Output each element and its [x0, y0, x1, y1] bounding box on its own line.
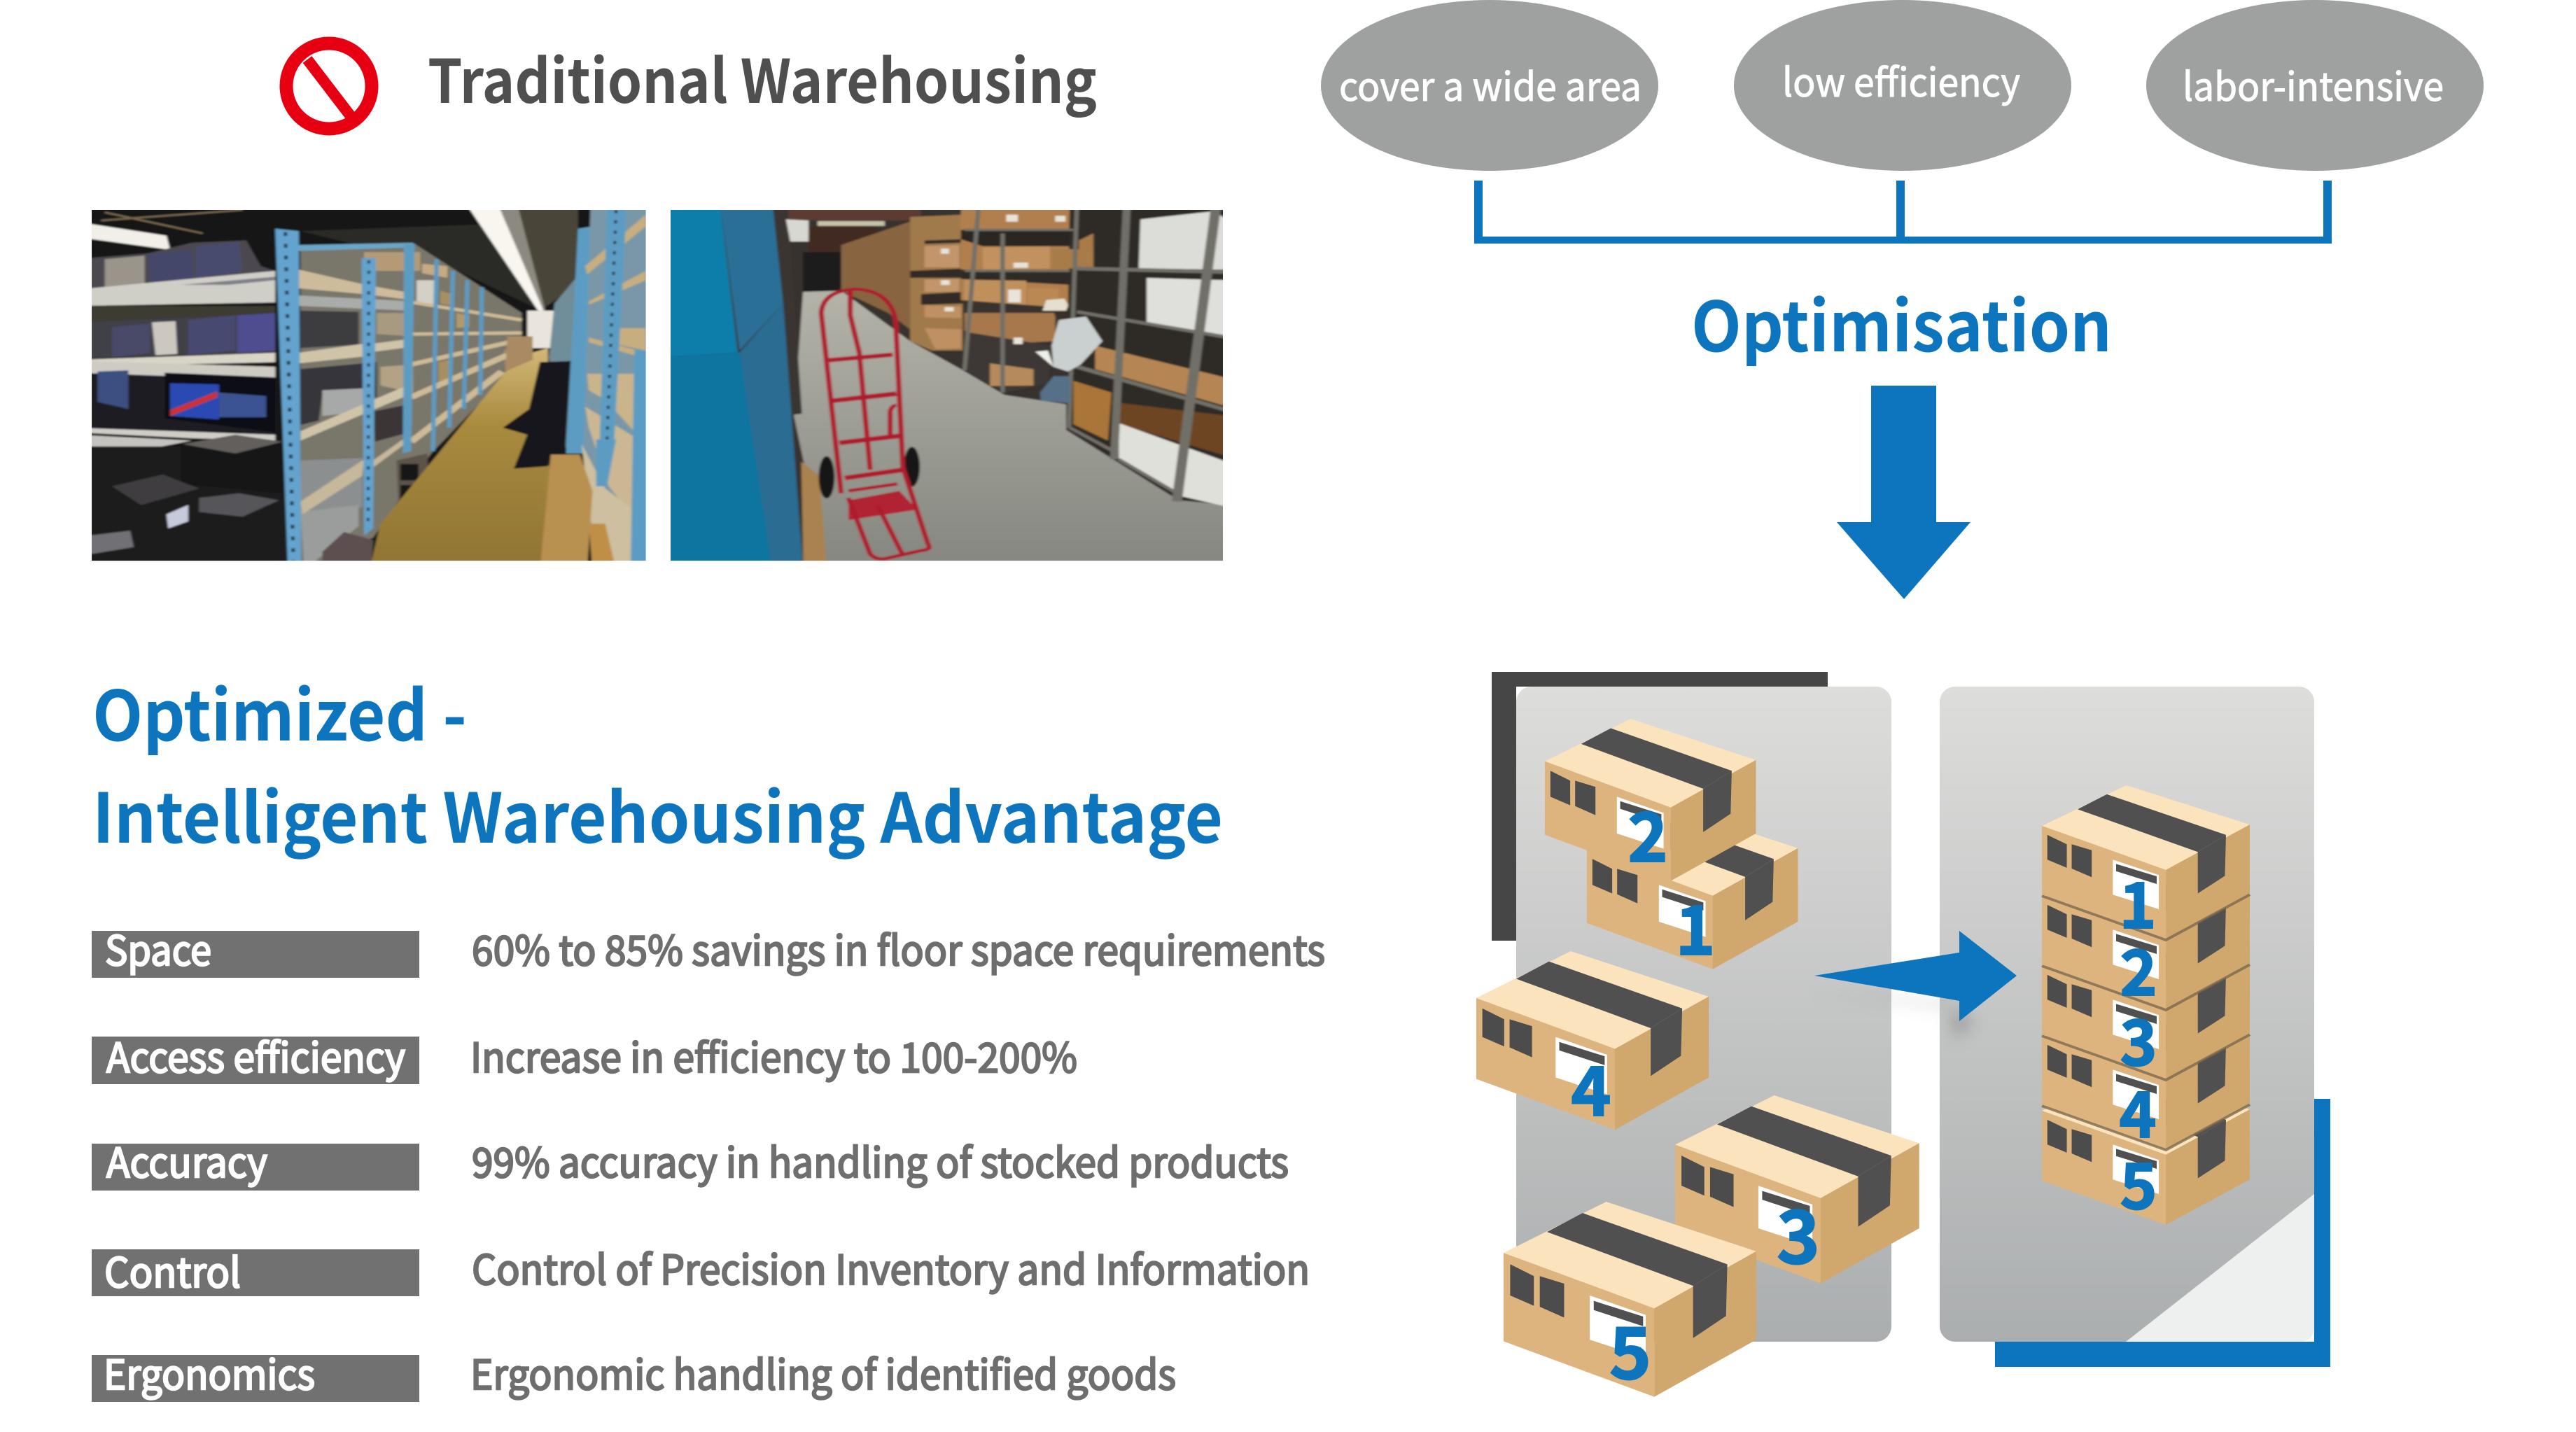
- box 5 scattered: [1504, 1202, 1756, 1400]
- oval: labor-intensive: labor-intensive: [2183, 56, 2444, 113]
- panel: disordered storage: [1516, 687, 1891, 1342]
- row: Access efficiency: Access efficiency: [106, 1025, 405, 1084]
- box 3 scattered: [1675, 1095, 1919, 1285]
- stack box 1: [2042, 785, 2250, 946]
- heading: Optimized - Intelligent Warehousing Advantage: Optimized -: [92, 661, 467, 761]
- panel: traditional warehousing header: [286, 33, 1097, 129]
- stack box 3: [2042, 925, 2250, 1083]
- heading: Optimisation: Optimisation: [1691, 272, 2112, 372]
- panel: problem ovals: [1321, 0, 2484, 171]
- bracket connecting ovals: [1474, 181, 2332, 244]
- photo: warehouse aisle with red hand truck: [656, 201, 1237, 570]
- stack box 4: 4: [2119, 1065, 2157, 1156]
- row: Space: 60% to 85% savings in floor space requirements: [472, 918, 1325, 977]
- row: Accuracy: [92, 1130, 1289, 1191]
- row: Space: Space: [105, 918, 211, 977]
- panel: ordered storage: [1940, 687, 2314, 1342]
- box 4 scattered: 4: [1571, 1037, 1611, 1135]
- row: Ergonomics: Ergonomic handling of identified goods: [470, 1342, 1176, 1401]
- box 3 scattered: 3: [1777, 1179, 1820, 1285]
- oval: labor-intensive: [2146, 0, 2484, 171]
- photo: warehouse aisle with batteries on blue shelving: [92, 210, 646, 561]
- dark corner accent: [1492, 672, 1828, 941]
- box 2 scattered: [1545, 719, 1756, 881]
- list: advantages: [92, 918, 1325, 1402]
- row: Access efficiency: Increase in efficiency to 100-200%: [470, 1025, 1077, 1084]
- row: Ergonomics: Ergonomics: [104, 1342, 315, 1401]
- oval: cover a wide area: [1321, 0, 1658, 171]
- stack box 2: 2: [2120, 922, 2157, 1013]
- oval: low efficiency: [1734, 0, 2071, 171]
- arrow shadow: [1806, 992, 1974, 1038]
- icon: prohibition sign: [286, 43, 372, 129]
- stack box 5: 5: [2120, 1136, 2157, 1227]
- heading: Optimized - Intelligent Warehousing Advantage: [92, 661, 1223, 863]
- floor corner highlight: [2126, 1194, 2314, 1342]
- stack box 1: 1: [2119, 855, 2157, 946]
- stack box 2: [2042, 855, 2250, 1013]
- row: Control: Control of Precision Inventory and Information: [472, 1237, 1310, 1296]
- row: Space: [92, 918, 1325, 978]
- oval: low efficiency: low efficiency: [1782, 52, 2020, 108]
- stacked boxes 1 to 5: [2042, 785, 2250, 1227]
- box 2 scattered: 2: [1628, 782, 1668, 881]
- oval: cover a wide area: cover a wide area: [1339, 56, 1642, 113]
- blue corner accent: [1995, 1099, 2330, 1367]
- heading: Traditional Warehousing: Traditional Warehousing: [428, 33, 1097, 120]
- row: Accuracy: Accuracy: [106, 1130, 267, 1189]
- stack box 3: 3: [2120, 992, 2157, 1083]
- box 1 scattered: 1: [1675, 876, 1716, 974]
- box 4 scattered: [1476, 951, 1709, 1135]
- row: Ergonomics: [92, 1342, 1176, 1402]
- illustration: scattered boxes stacked in order: [1476, 672, 2330, 1400]
- heading: Optimized - Intelligent Warehousing Advantage: Intelligent Warehousing Advantage: [92, 764, 1223, 863]
- stack box 4: [2042, 995, 2250, 1156]
- stack box 5: [2042, 1070, 2250, 1227]
- row: Control: Control: [104, 1240, 241, 1299]
- box 5 scattered: 5: [1609, 1297, 1651, 1400]
- arrow: down: [1837, 386, 1970, 599]
- row: Access efficiency: [92, 1025, 1077, 1084]
- arrow: right: [1814, 931, 2017, 1021]
- row: Accuracy: 99% accuracy in handling of stocked products: [472, 1130, 1289, 1189]
- row: Control: [92, 1237, 1310, 1299]
- box 1 scattered: [1587, 807, 1798, 974]
